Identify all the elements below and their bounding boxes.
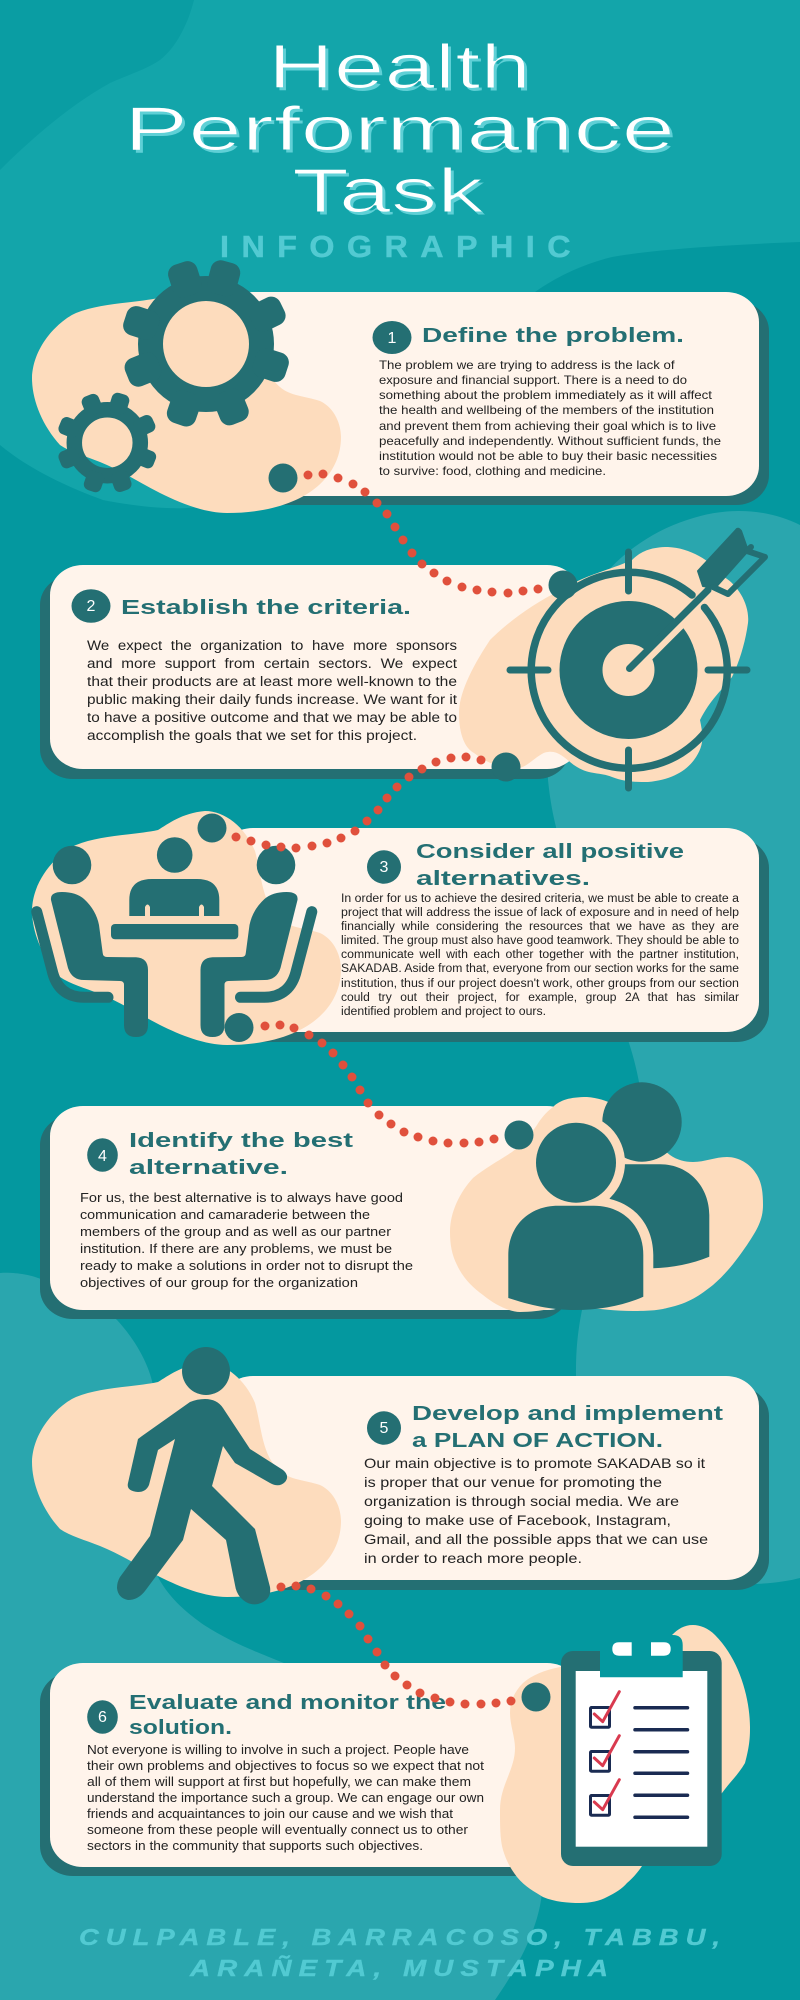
text block 1: institution would not be able to buy their basic necessities bbox=[379, 449, 717, 463]
heading 5: Develop and implement bbox=[412, 1403, 723, 1425]
icon: small gear bbox=[57, 391, 158, 494]
title bbox=[124, 33, 678, 229]
connector: step 3 to step 4 bbox=[224, 1013, 534, 1150]
text block 1: something about the problem immediately as it will affect bbox=[379, 388, 713, 402]
connector: step 2 to step 3 bbox=[198, 752, 520, 852]
title: Health bbox=[271, 36, 534, 105]
text block 3: institution, thus if our project doesn't work, other groups from our section bbox=[341, 978, 739, 990]
text block 2: that their products are at least more well-known to the bbox=[87, 674, 457, 689]
panel 2: establish the criteria bbox=[40, 529, 765, 788]
text block 3: limited. The group must also have good teamwork. They should be able to bbox=[341, 935, 739, 947]
heading 6: solution. bbox=[129, 1717, 232, 1739]
heading 3: alternatives. bbox=[416, 868, 590, 890]
icon: target with arrow bbox=[510, 529, 765, 788]
text block 3: could try out their project, for example, group 2A that has similar bbox=[341, 992, 739, 1004]
icon: large gear bbox=[121, 258, 291, 429]
text block 3: SAKADAB. Aside from that, everyone from our section works for the same bbox=[341, 963, 739, 975]
text block 6: friends and acquaintances to join our cause and we wish that bbox=[87, 1807, 454, 1821]
text block 6 bbox=[87, 1743, 485, 1853]
number badge 6 bbox=[87, 1700, 118, 1734]
number badge 3: 3 bbox=[380, 859, 389, 876]
number badge 2: 2 bbox=[87, 598, 96, 615]
panel 6: evaluate and monitor the solution bbox=[40, 1625, 750, 1903]
text block 5: organization is through social media. We are bbox=[364, 1493, 679, 1509]
text block 3 bbox=[341, 893, 740, 1018]
heading 4: alternative. bbox=[129, 1157, 288, 1179]
panel 4: identify the best alternative bbox=[40, 1082, 763, 1319]
number badge 1: 1 bbox=[388, 330, 397, 347]
title: Task bbox=[292, 157, 486, 226]
text block 2: to have a positive outcome and that we may be able to bbox=[87, 710, 457, 725]
number badge 3 bbox=[367, 850, 401, 884]
title: Task bbox=[295, 160, 489, 229]
icon: walking person bbox=[117, 1347, 287, 1604]
text block 1 bbox=[379, 358, 721, 478]
icon: two people bbox=[508, 1082, 709, 1310]
connector: step 1 to step 2 bbox=[268, 464, 578, 600]
text block 1: the health and wellbeing of the members of the institution bbox=[379, 403, 714, 417]
heading 3: Consider all positive bbox=[416, 841, 684, 863]
text block 1: The problem we are trying to address is the lack of bbox=[379, 358, 675, 372]
text block 5: Gmail, and all the possible apps that we can use bbox=[364, 1531, 708, 1547]
text block 1: to survive: food, clothing and medicine. bbox=[379, 464, 606, 478]
title: Performance bbox=[127, 98, 678, 167]
heading 3 bbox=[416, 841, 684, 890]
number badge 6: 6 bbox=[98, 1709, 107, 1726]
text block 2: accomplish the goals that we set for this project. bbox=[87, 728, 417, 743]
text block 4: members of the group and as well as our partner bbox=[80, 1224, 392, 1239]
text block 5 bbox=[364, 1455, 708, 1566]
icon: meeting around a table bbox=[37, 837, 312, 1037]
text block 2: and more support from certain sectors. We expect bbox=[87, 656, 457, 671]
title: Health bbox=[268, 33, 531, 102]
text block 3: In order for us to achieve the desired criteria, we must be able to create a bbox=[341, 893, 740, 905]
text block 4: For us, the best alternative is to always have good bbox=[80, 1190, 403, 1205]
panel 5: develop and implement a plan of action bbox=[32, 1347, 769, 1604]
footer: group members: CULPABLE, BARRACOSO, TABBU, bbox=[79, 1924, 727, 1950]
heading 5: a PLAN OF ACTION. bbox=[412, 1430, 663, 1452]
number badge 5 bbox=[367, 1411, 401, 1445]
text block 4: communication and camaraderie between the bbox=[80, 1207, 370, 1222]
number badge 4: 4 bbox=[98, 1148, 107, 1165]
text block 6: all of them will support at first but hopefully, we can make them bbox=[87, 1775, 471, 1789]
text block 6: understand the importance such a group. We can engage our own bbox=[87, 1791, 484, 1805]
heading 2: Establish the criteria. bbox=[121, 597, 411, 619]
text block 4: objectives of our group for the organization bbox=[80, 1275, 358, 1290]
title: Performance bbox=[124, 95, 675, 164]
panel 1: define the problem bbox=[32, 258, 769, 513]
footer: group members bbox=[79, 1924, 727, 1981]
text block 6: sectors in the community that supports such objectives. bbox=[87, 1839, 423, 1853]
footer: group members: ARAÑETA, MUSTAPHA bbox=[189, 1954, 615, 1981]
text block 2: public making their daily funds increase. We want for it bbox=[87, 692, 457, 707]
text block 3: identified problem and project to ours. bbox=[341, 1006, 546, 1018]
number badge 5: 5 bbox=[380, 1420, 389, 1437]
text block 2 bbox=[87, 638, 457, 743]
text block 4 bbox=[80, 1190, 413, 1290]
text block 3: financially while considering the resources that we have as they are bbox=[341, 921, 739, 933]
text block 5: Our main objective is to promote SAKADAB so it bbox=[364, 1455, 705, 1471]
heading 6: Evaluate and monitor the bbox=[129, 1692, 446, 1714]
text block 6: their own problems and objectives to focus so we expect that not bbox=[87, 1759, 485, 1773]
text block 1: exposure and financial support. There is a need to do bbox=[379, 373, 687, 387]
number badge 2 bbox=[72, 589, 110, 623]
text block 5: in order to reach more people. bbox=[364, 1550, 582, 1566]
text block 5: going to make use of Facebook, Instagram, bbox=[364, 1512, 671, 1528]
text block 5: is proper that our venue for promoting the bbox=[364, 1474, 662, 1490]
connector: step 5 to step 6 bbox=[276, 1582, 550, 1712]
panel 3: consider all positive alternatives bbox=[32, 811, 769, 1045]
heading 6 bbox=[129, 1692, 446, 1739]
heading 1: Define the problem. bbox=[422, 325, 684, 347]
number badge 4 bbox=[87, 1138, 118, 1172]
text block 3: project that will address the issue of lack of exposure and in need of help bbox=[341, 907, 739, 919]
text block 6: Not everyone is willing to involve in such a project. People have bbox=[87, 1743, 469, 1757]
text block 1: peacefully and independently. Without sufficient funds, the bbox=[379, 434, 721, 448]
text block 3: communicate well with each other together with the partner institution, bbox=[341, 949, 739, 961]
number badge 1 bbox=[372, 321, 412, 354]
subtitle: INFOGRAPHIC bbox=[220, 229, 583, 264]
text block 4: ready to make a solutions in order not to disrupt the bbox=[80, 1258, 413, 1273]
heading 5 bbox=[412, 1403, 723, 1452]
heading 4 bbox=[129, 1130, 353, 1179]
text block 4: institution. If there are any problems, we must be bbox=[80, 1241, 392, 1256]
heading 4: Identify the best bbox=[129, 1130, 353, 1152]
text block 6: someone from these people will eventually connect us to other bbox=[87, 1823, 468, 1837]
text block 1: and prevent them from achieving their goal which is to live bbox=[379, 419, 716, 433]
icon: clipboard checklist bbox=[561, 1635, 722, 1866]
text block 2: We expect the organization to have more sponsors bbox=[87, 638, 457, 653]
